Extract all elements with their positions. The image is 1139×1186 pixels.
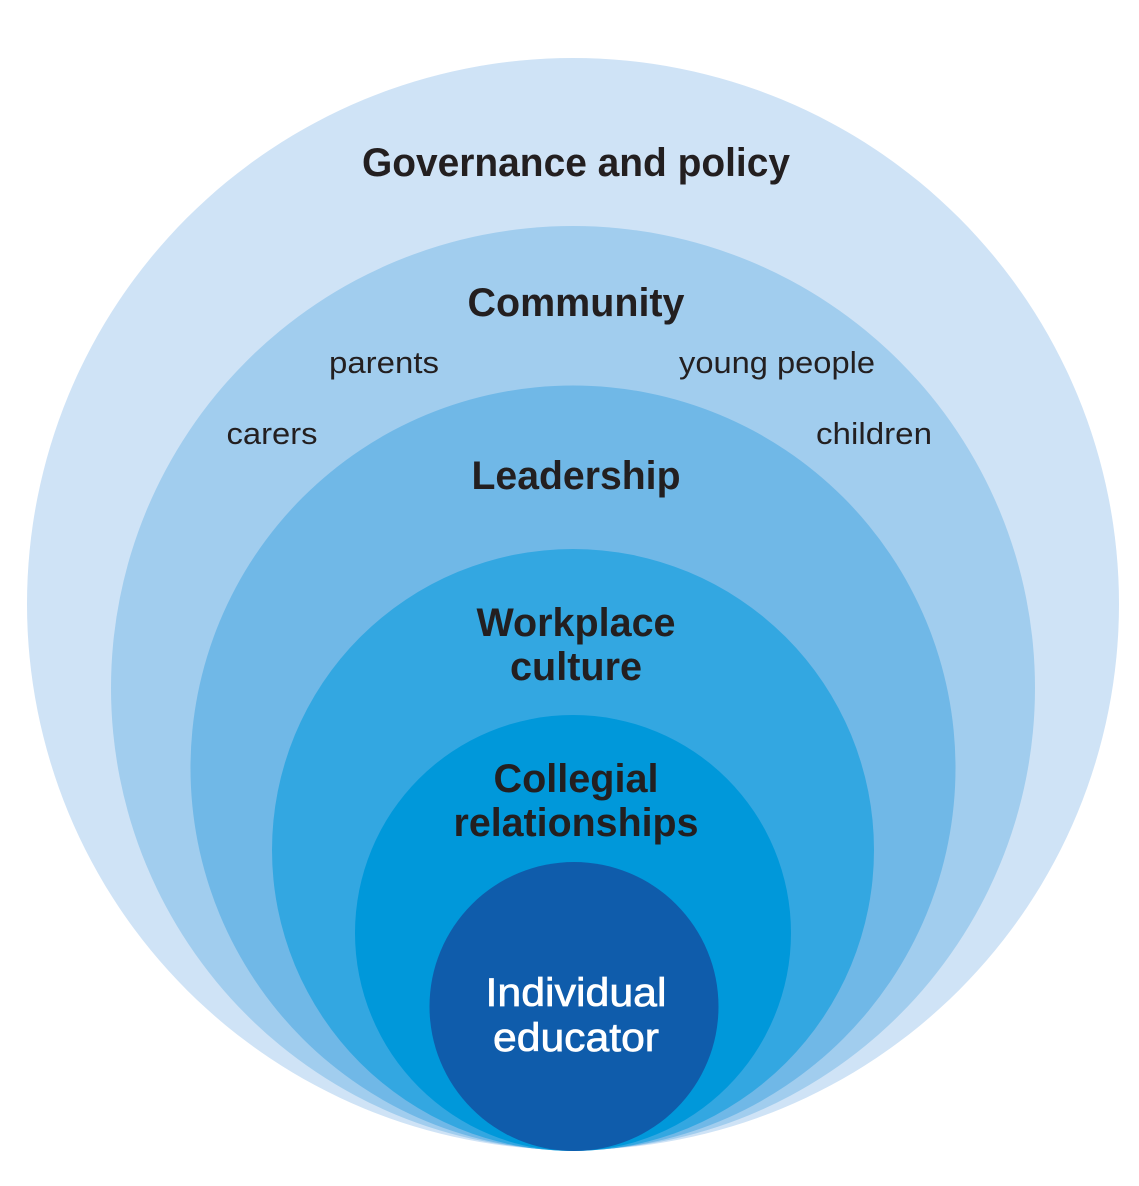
label: carers: carers: [226, 416, 318, 451]
circle: Collegial relationships: relationships: [454, 801, 698, 845]
circle: Workplace culture: [272, 549, 874, 1151]
label: children: children: [816, 416, 932, 451]
heading: Leadership: Leadership: [472, 454, 680, 498]
heading: Governance and policy: Governance and policy: [362, 141, 791, 185]
circle: Workplace culture: culture: [510, 645, 642, 689]
circle: Individual educator: [430, 862, 718, 1151]
heading: Collegial relationships: Collegial: [494, 757, 658, 801]
circle: Collegial relationships: [355, 715, 791, 1151]
label: parents: parents: [329, 345, 439, 380]
circle: Individual educator: educator: [493, 1016, 659, 1060]
heading: Individual educator: Individual: [486, 971, 666, 1015]
label: young people: young people: [679, 345, 875, 380]
heading: Community: Community: [468, 281, 685, 325]
circle: Community: [111, 226, 1035, 1150]
heading: Workplace culture: Workplace: [476, 601, 676, 645]
